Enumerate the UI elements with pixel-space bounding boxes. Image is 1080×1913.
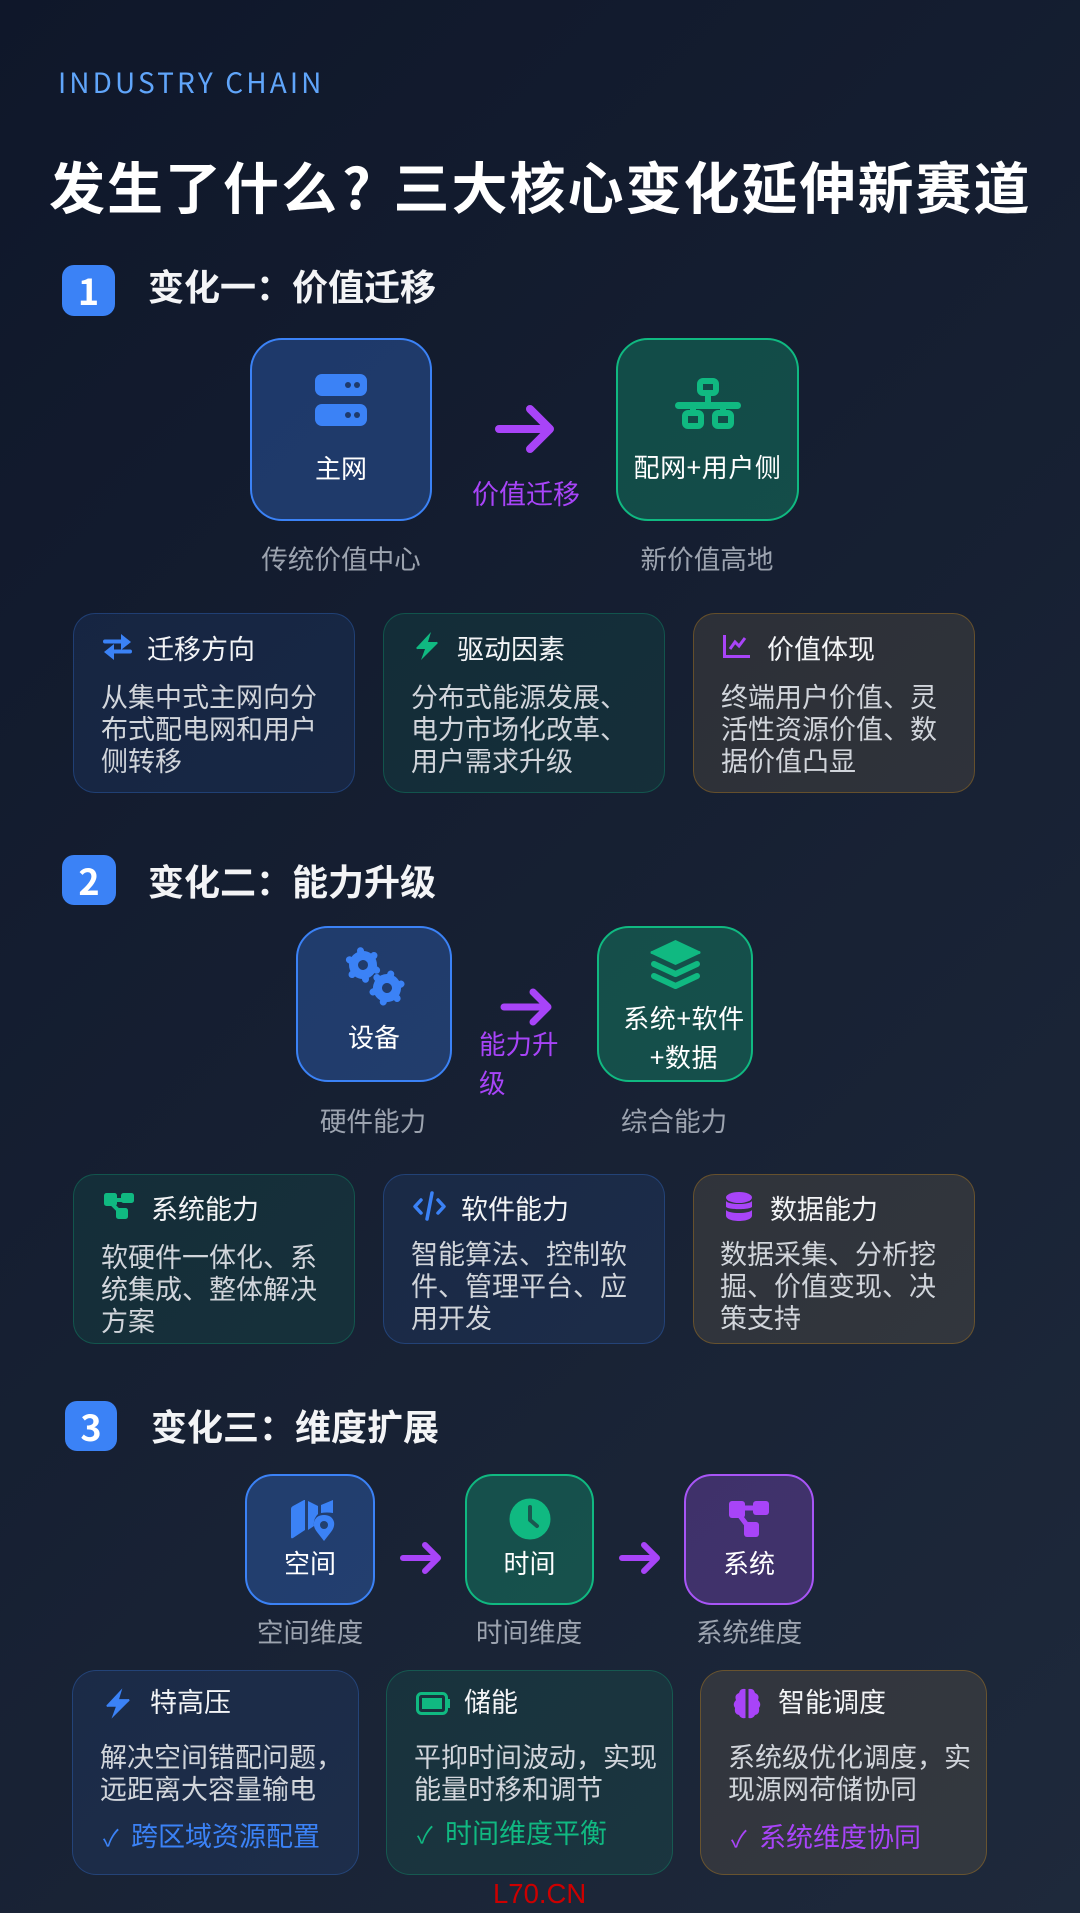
card: 价值体现 — [693, 613, 975, 793]
icon: battery — [416, 1692, 450, 1715]
node: 时间 — [465, 1474, 594, 1605]
node: 系统 — [684, 1474, 814, 1605]
card body: 智能算法、控制软 — [411, 1233, 627, 1272]
icon: layers — [650, 940, 700, 989]
card body: 活性资源价值、数 — [721, 708, 937, 747]
section 1 heading: 变化一：价值迁移 — [148, 259, 436, 311]
section 2 heading: 变化二：能力升级 — [148, 854, 436, 906]
section 2 heading: 2 — [78, 854, 100, 906]
card title: 价值体现 — [767, 628, 875, 667]
arrow label: 价值迁移 — [472, 473, 580, 512]
card body — [721, 676, 937, 779]
card title: 数据能力 — [770, 1188, 878, 1227]
icon: network — [675, 378, 741, 429]
icon: sitemap — [729, 1501, 769, 1537]
caption: 综合能力: 综合能力 — [621, 1100, 727, 1139]
node label: 配网+用户侧 — [633, 448, 782, 485]
caption: 系统维度: 系统维度 — [696, 1611, 802, 1650]
card: 系统能力 — [73, 1174, 355, 1344]
card body — [101, 1236, 317, 1339]
card: 储能 — [386, 1670, 673, 1875]
icon: gears — [346, 947, 404, 1006]
card title: 迁移方向 — [147, 628, 255, 667]
title: 发生了什么? 三大核心变化延伸新赛道 — [49, 145, 1032, 226]
node: 系统+软件+数据 — [597, 926, 753, 1082]
arrow: 空间 to 时间 — [400, 1542, 441, 1574]
card body: 件、管理平台、应 — [411, 1265, 627, 1304]
node label: 设备 — [348, 1018, 400, 1055]
card result: ✓ — [103, 1819, 119, 1853]
arrow label: 能力升 — [479, 1023, 558, 1062]
caption: 空间维度: 空间维度 — [257, 1611, 363, 1650]
card body: 用开发 — [411, 1297, 492, 1336]
icon: map pin — [291, 1500, 334, 1541]
card title: 系统能力 — [151, 1188, 259, 1227]
icon: server — [315, 374, 367, 426]
card body: 分布式能源发展、 — [411, 676, 627, 715]
node label: 空间 — [284, 1544, 336, 1581]
icon: code — [413, 1191, 446, 1221]
icon: exchange arrows — [103, 634, 132, 660]
card body — [100, 1736, 343, 1807]
node: 主网 — [250, 338, 432, 521]
card: 软件能力 — [383, 1174, 665, 1344]
card: 驱动因素 — [383, 613, 665, 793]
icon: brain — [734, 1688, 760, 1718]
card body: 掘、价值变现、决 — [720, 1265, 936, 1304]
icon: bolt — [106, 1688, 130, 1718]
node label: +数据 — [650, 1038, 718, 1075]
card body: 从集中式主网向分 — [101, 676, 317, 715]
card result: ✓ — [731, 1820, 747, 1854]
card: 迁移方向 — [73, 613, 355, 793]
card body — [720, 1233, 936, 1336]
icon: database — [726, 1192, 752, 1221]
card body: 远距离大容量输电 — [100, 1768, 316, 1807]
node: 设备 — [296, 926, 452, 1082]
card: 数据能力 — [693, 1174, 975, 1344]
caption: 传统价值中心: 传统价值中心 — [261, 538, 421, 577]
card body: 平抑时间波动，实现 — [414, 1736, 657, 1775]
caption: 新价值高地: 新价值高地 — [641, 538, 773, 577]
card result: ✓ — [417, 1816, 433, 1850]
node: 空间 — [245, 1474, 375, 1605]
card body — [414, 1736, 657, 1807]
card body — [411, 676, 627, 779]
card body: 软硬件一体化、系 — [101, 1236, 317, 1275]
card result: 时间维度平衡 — [445, 1812, 607, 1851]
card: 特高压 — [72, 1670, 359, 1875]
node label: 主网 — [315, 449, 367, 486]
card title: 特高压 — [150, 1681, 231, 1720]
card title: 储能 — [464, 1681, 518, 1720]
icon: bolt — [416, 632, 438, 660]
card result: 系统维度协同 — [759, 1816, 921, 1855]
card body: 终端用户价值、灵 — [721, 676, 937, 715]
card body — [728, 1736, 971, 1807]
card body: 侧转移 — [101, 740, 182, 779]
card body: 方案 — [101, 1300, 155, 1339]
card result: 跨区域资源配置 — [131, 1815, 320, 1854]
card body: 解决空间错配问题， — [100, 1736, 343, 1775]
card body: 数据采集、分析挖 — [720, 1233, 936, 1272]
section 1 heading: 1 — [78, 264, 99, 316]
node label: 系统 — [723, 1544, 775, 1581]
card body: 统集成、整体解决 — [101, 1268, 317, 1307]
card body: 用户需求升级 — [411, 740, 573, 779]
node label: 时间 — [503, 1544, 556, 1581]
card: 智能调度 — [700, 1670, 987, 1875]
card body: 电力市场化改革、 — [411, 708, 627, 747]
card body — [411, 1233, 627, 1336]
kicker label: INDUSTRY CHAIN — [58, 62, 324, 102]
card body — [101, 676, 317, 779]
card body: 系统级优化调度，实 — [728, 1736, 971, 1775]
section 3 heading: 3 — [80, 1400, 102, 1452]
icon: sitemap — [104, 1193, 134, 1219]
arrow: value migration — [495, 405, 554, 453]
node label — [623, 999, 745, 1075]
card body: 据价值凸显 — [721, 740, 856, 779]
caption: 硬件能力: 硬件能力 — [320, 1100, 426, 1139]
icon: clock — [510, 1498, 550, 1540]
arrow label — [479, 1023, 558, 1100]
arrow: 时间 to 系统 — [619, 1542, 660, 1574]
section 3 heading: 变化三：维度扩展 — [151, 1399, 439, 1451]
node: 配网+用户侧 — [616, 338, 799, 521]
card body: 策支持 — [720, 1297, 801, 1336]
watermark: L70.CN — [493, 1878, 586, 1909]
arrow: capability upgrade — [500, 988, 552, 1026]
icon: line chart — [723, 635, 750, 658]
card body: 布式配电网和用户 — [101, 708, 317, 747]
card title: 软件能力 — [461, 1188, 569, 1227]
node label: 系统+软件 — [623, 999, 745, 1036]
arrow label: 级 — [479, 1062, 506, 1100]
card title: 驱动因素 — [457, 628, 565, 667]
card body: 能量时移和调节 — [414, 1768, 603, 1807]
caption: 时间维度: 时间维度 — [476, 1611, 582, 1650]
card body: 现源网荷储协同 — [728, 1768, 917, 1807]
card title: 智能调度 — [778, 1681, 886, 1720]
